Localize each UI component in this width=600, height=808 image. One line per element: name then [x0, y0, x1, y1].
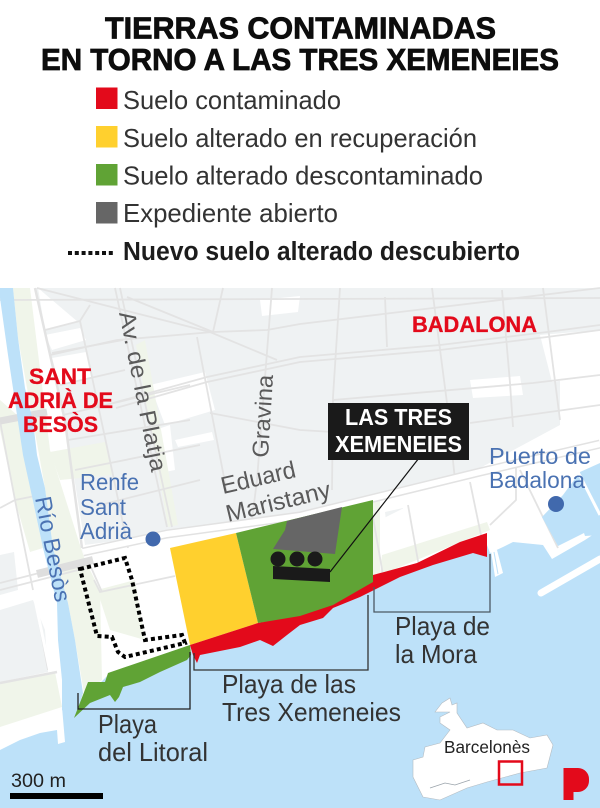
street label: Eduard Maristany: Maristany [223, 477, 333, 528]
label: Las Tres Xemeneies: LAS TRES [345, 404, 452, 430]
street label: Eduard Maristany [218, 456, 333, 528]
title: TIERRAS CONTAMINADAS [105, 10, 496, 46]
street label: Av. de la Platja: Av. de la Platja [114, 309, 172, 474]
area: suelo contaminado [190, 533, 487, 663]
label: Sant Adrià de Besòs: ADRIÀ DE [8, 388, 113, 413]
label: Puerto de Badalona [489, 443, 591, 493]
Río Besòs [0, 288, 83, 720]
legend [68, 85, 520, 266]
area: expediente abierto [273, 507, 342, 554]
map: land base [0, 288, 600, 808]
area: suelo alterado descontaminado [236, 500, 373, 623]
icon: port dot [548, 496, 564, 512]
map: Eduard Maristany avenue [83, 444, 600, 552]
street label: Gravina: Gravina [247, 374, 278, 458]
legend: suelo contaminado: Suelo contaminado [123, 85, 341, 115]
logo: P [564, 768, 589, 800]
locator map: Barcelonès: Barcelonès [444, 737, 530, 757]
label: Playa de las Tres Xemeneies [222, 669, 401, 727]
sea [0, 530, 600, 808]
label: Badalona: BADALONA [412, 312, 537, 337]
legend: suelo alterado descontaminado: Suelo alterado descontaminado [123, 160, 483, 190]
label: Renfe Sant Adrià: Renfe [80, 469, 139, 495]
bracket: Playa del Litoral [78, 652, 190, 709]
label: Las Tres Xemeneies [328, 403, 469, 460]
icon: Renfe station dot [146, 532, 160, 546]
label: Renfe Sant Adrià: Adrià [80, 518, 132, 544]
scale bar [10, 771, 103, 799]
street label: Eduard Maristany: Eduard [218, 456, 298, 500]
map: city blocks [0, 288, 600, 682]
label: Renfe Sant Adrià [80, 469, 139, 544]
label: Playa de las Tres Xemeneies: Tres Xemeneies [222, 697, 401, 727]
locator map: Barcelonès [413, 698, 553, 800]
title: EN TORNO A LAS TRES XEMENEIES [41, 42, 559, 77]
label: Playa del Litoral [98, 709, 208, 767]
bracket: Playa de las Tres Xemeneies [194, 595, 368, 670]
legend: expediente abierto: Expediente abierto [123, 198, 338, 228]
leader line [330, 458, 419, 572]
label: Sant Adrià de Besòs [8, 364, 113, 437]
legend: suelo alterado en recuperación: Suelo alterado en recuperación [123, 123, 477, 153]
label: Renfe Sant Adrià: Sant [80, 494, 127, 520]
label: Sant Adrià de Besòs: SANT [29, 364, 92, 389]
label: Playa de la Mora: la Mora [395, 639, 478, 669]
map [0, 288, 600, 808]
label: Puerto de Badalona: Puerto de [489, 443, 591, 469]
label: Playa del Litoral: Playa [98, 709, 157, 739]
label: Sant Adrià de Besòs: BESÒS [23, 412, 98, 437]
dotted outline: nuevo suelo alterado descubierto [80, 558, 185, 657]
area: Playa del Litoral green [74, 645, 191, 718]
label: Playa del Litoral: del Litoral [98, 737, 208, 767]
scale bar: 300 m [11, 771, 66, 792]
map: green park strips [0, 288, 490, 727]
legend: nuevo suelo alterado descubierto: Nuevo suelo alterado descubierto [123, 238, 520, 266]
label: Las Tres Xemeneies: XEMENEIES [335, 431, 462, 457]
label: Río Besòs: Río Besòs [30, 494, 76, 604]
icon: three chimneys [270, 552, 330, 582]
map: streets [0, 288, 600, 683]
title [41, 10, 559, 77]
label: Playa de las Tres Xemeneies: Playa de las [222, 669, 356, 699]
port basin [542, 463, 600, 546]
label: Playa de la Mora: Playa de [395, 611, 490, 641]
map: white open areas [38, 288, 600, 680]
label: Playa de la Mora [395, 611, 490, 669]
map: bridges [0, 412, 93, 574]
bracket: Playa de la Mora [374, 554, 490, 612]
port breakwaters [491, 470, 600, 593]
label: Puerto de Badalona: Badalona [489, 467, 585, 493]
area: suelo alterado en recuperación [170, 533, 258, 645]
